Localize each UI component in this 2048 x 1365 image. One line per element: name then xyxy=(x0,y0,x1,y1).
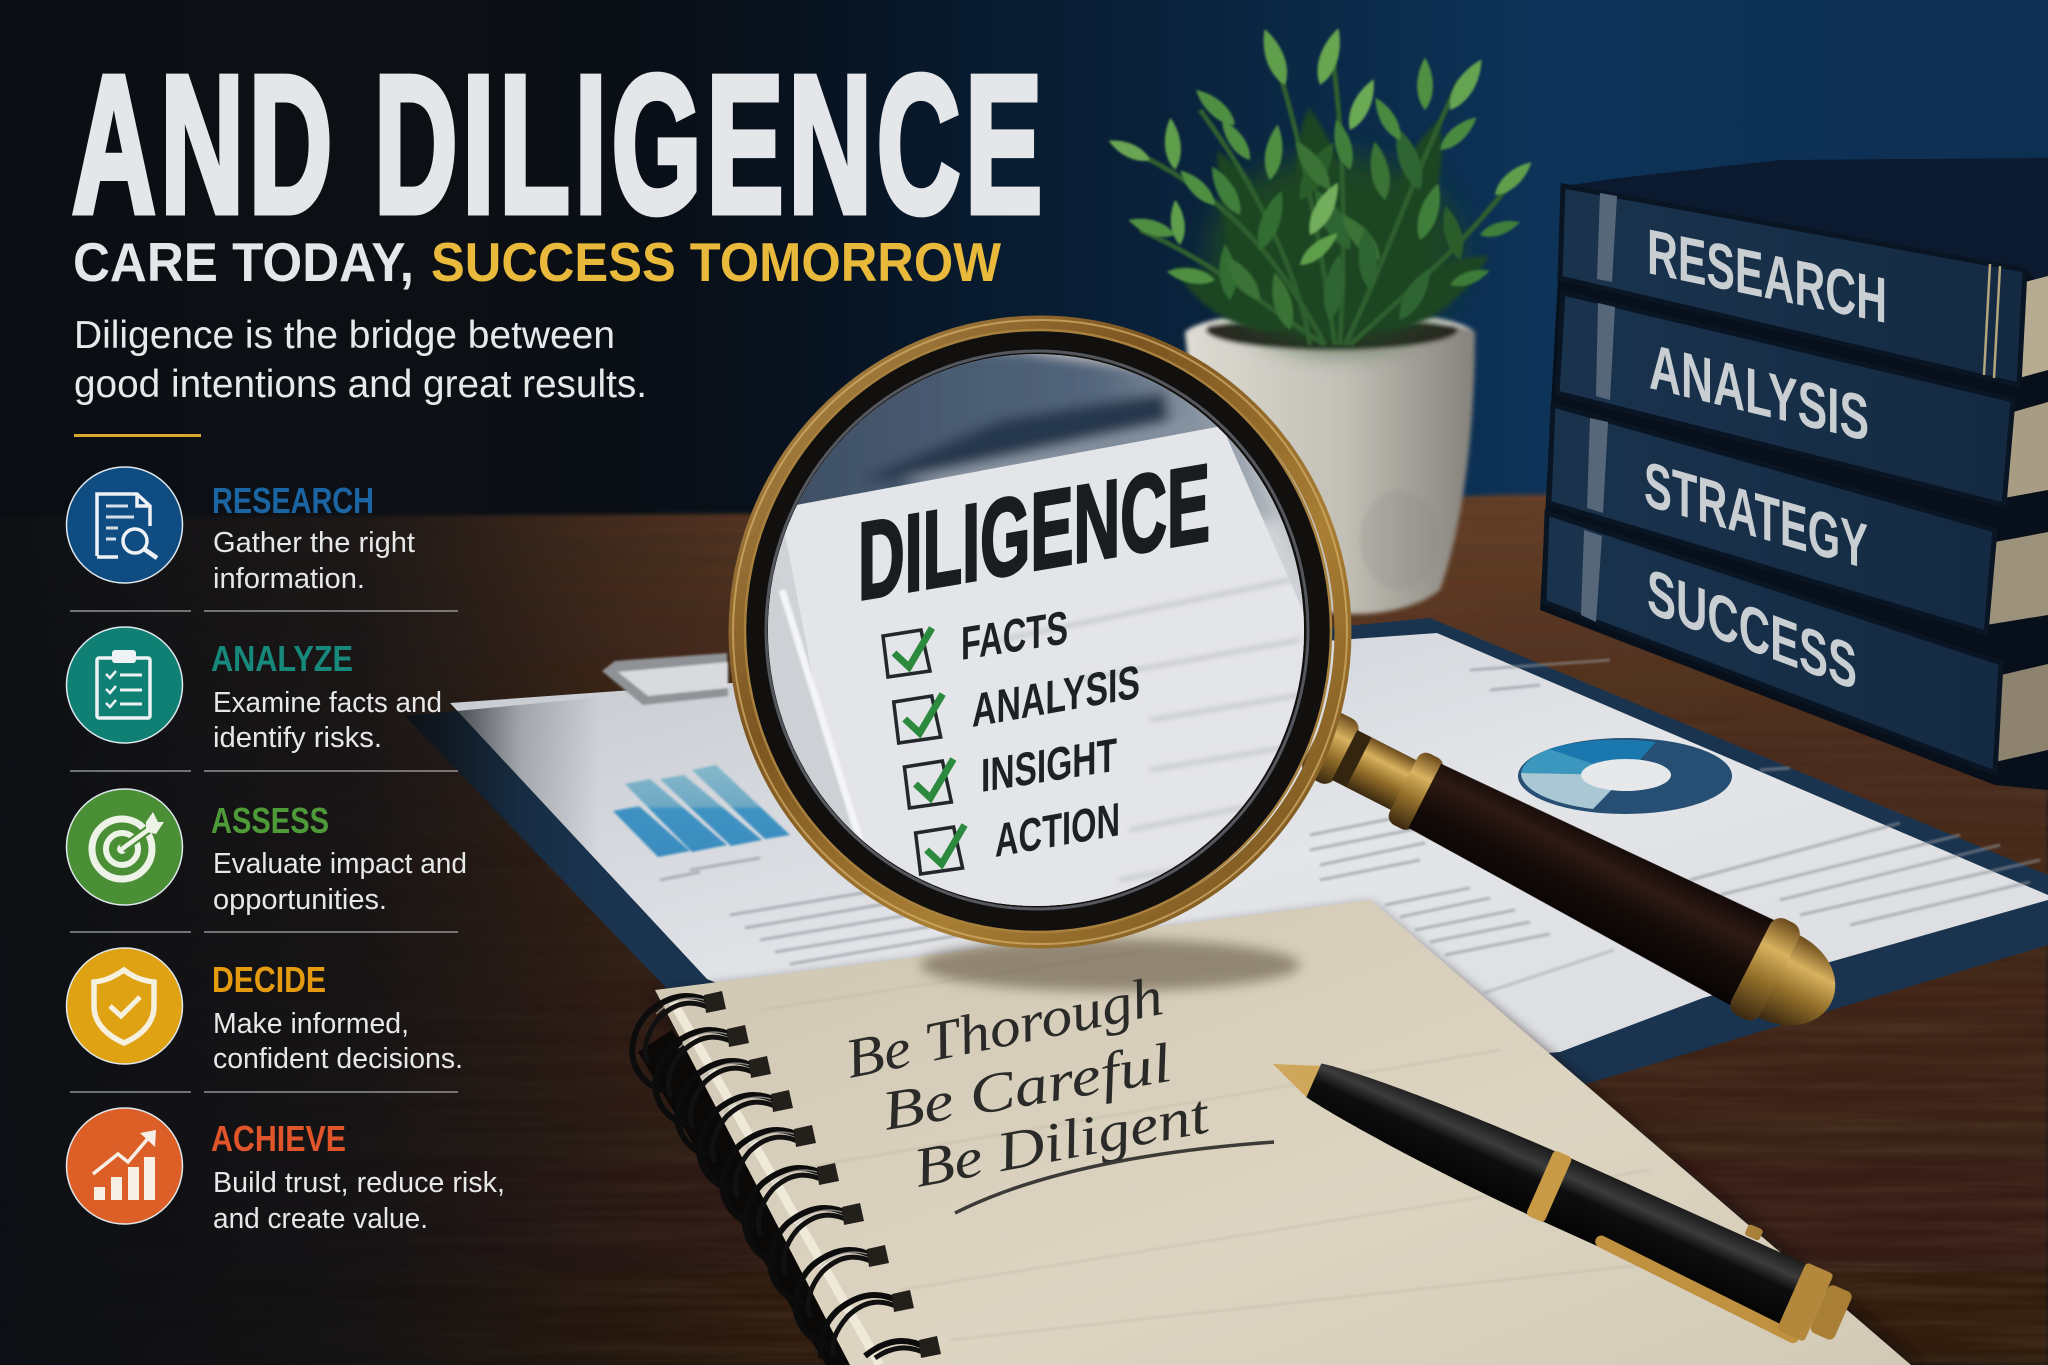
fountain pen xyxy=(1257,1022,1862,1352)
plant stems xyxy=(1130,50,1520,345)
notebook page xyxy=(655,900,1911,1365)
checklist: action xyxy=(916,793,1120,874)
line: be thorough: Be Thorough xyxy=(840,965,1168,1091)
thin gold line xyxy=(745,330,1331,932)
subtitle: SUCCESS TOMORROW xyxy=(431,231,1001,293)
description: achieve: and create value. xyxy=(213,1203,428,1235)
description: research: information. xyxy=(213,563,365,595)
page block edge xyxy=(672,1000,880,1365)
description: decide: Make informed, xyxy=(213,1008,409,1040)
checklist: analysis: ANALYSIS xyxy=(972,656,1140,738)
pen underline xyxy=(955,1142,1274,1213)
notebook xyxy=(632,900,1925,1365)
lens contents xyxy=(750,350,1320,920)
binder clip xyxy=(602,653,728,705)
rim highlight xyxy=(733,320,1347,944)
step: research xyxy=(66,467,415,595)
step: decide xyxy=(66,948,463,1075)
plant leaves xyxy=(1106,26,1536,332)
subtitle: CARE TODAY, xyxy=(73,231,414,293)
checklist: insight xyxy=(904,729,1117,808)
icon: document with magnifier xyxy=(66,467,182,583)
title: AND DILIGENCE xyxy=(72,35,1047,254)
stack of four books xyxy=(1540,158,2048,790)
line: be diligent: Be Diligent xyxy=(909,1083,1215,1200)
faint lines in lens xyxy=(1000,580,1300,880)
dark stack backing xyxy=(1540,186,2048,790)
tagline: Diligence is the bridge between xyxy=(74,314,615,357)
description: research: Gather the right xyxy=(213,527,415,559)
coil underside xyxy=(638,1030,900,1365)
sheet fold highlight xyxy=(782,590,866,860)
gold outer rim xyxy=(737,324,1343,940)
description: achieve: Build trust, reduce risk, xyxy=(213,1167,505,1199)
tagline: good intentions and great results. xyxy=(74,363,647,406)
step: analyze xyxy=(66,627,442,754)
icon: target with arrow xyxy=(66,789,182,905)
handwritten note xyxy=(840,965,1274,1213)
gold spine lines xyxy=(1984,264,2000,378)
heading: assess: ASSESS xyxy=(211,800,329,841)
heading: achieve: ACHIEVE xyxy=(211,1118,346,1159)
spiral binding xyxy=(632,991,941,1358)
lens heading: DILIGENCE xyxy=(858,442,1210,624)
navy folder xyxy=(405,618,2048,1110)
icon: rising bar chart xyxy=(66,1108,182,1224)
book title: analysis: ANALYSIS xyxy=(1649,330,1869,455)
heading: research: RESEARCH xyxy=(212,480,374,521)
bezel glass edge xyxy=(766,351,1308,909)
checklist: action: ACTION xyxy=(995,793,1120,868)
book title: success: SUCCESS xyxy=(1647,555,1857,705)
description: assess: opportunities. xyxy=(213,884,387,916)
description: decide: confident decisions. xyxy=(213,1043,463,1075)
line: be careful: Be Careful xyxy=(878,1032,1176,1143)
dividers xyxy=(70,611,458,1092)
heading: analyze: ANALYZE xyxy=(211,638,353,679)
step: achieve xyxy=(66,1108,505,1235)
checklist: facts xyxy=(881,612,1067,679)
icon: shield with check xyxy=(66,948,182,1064)
donut chart xyxy=(1518,738,1732,814)
top cover of stack xyxy=(1563,158,2048,290)
dark fade over folder xyxy=(405,699,586,866)
page shadow xyxy=(650,905,1925,1365)
icon: clipboard checklist xyxy=(66,627,182,743)
bar chart xyxy=(613,765,790,857)
book title: strategy: STRATEGY xyxy=(1644,447,1868,583)
dark inner bezel xyxy=(757,343,1317,919)
plant in stone pot xyxy=(1106,26,1536,614)
accent rule xyxy=(74,434,201,437)
report folder with papers xyxy=(400,618,2048,1110)
magnifier handle xyxy=(1290,691,1856,1051)
description: assess: Evaluate impact and xyxy=(213,848,467,880)
magnifier shadow xyxy=(920,939,1300,991)
heading: decide: DECIDE xyxy=(212,959,326,1000)
book title: research: RESEARCH xyxy=(1647,215,1887,337)
stone pot xyxy=(1185,310,1475,614)
lens document sheet xyxy=(780,426,1320,920)
background: wooden desk xyxy=(12,492,2048,1365)
step: assess xyxy=(66,789,467,916)
checklist: analysis xyxy=(894,656,1140,743)
book spines xyxy=(1544,186,2025,773)
ruled lines xyxy=(760,950,1780,1340)
checklist: insight: INSIGHT xyxy=(981,729,1117,803)
paper sheet xyxy=(450,633,2048,1100)
description: analyze: identify risks. xyxy=(213,722,382,754)
page blocks xyxy=(1986,276,2048,762)
checklist: facts: FACTS xyxy=(961,601,1068,671)
spine bands xyxy=(1581,193,1617,622)
description: analyze: Examine facts and xyxy=(213,687,442,719)
faint report text xyxy=(660,660,2040,993)
blurred background in lens xyxy=(790,354,1300,584)
background: blue wall xyxy=(0,0,2048,530)
plant shadow mass xyxy=(1163,104,1500,353)
magnifying glass xyxy=(733,320,1856,1051)
